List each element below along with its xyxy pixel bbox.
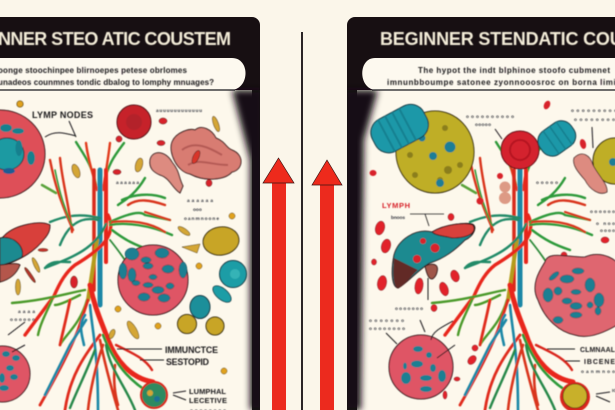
label: immunotherapy: IMMUNCTCE <box>165 345 218 355</box>
panel: left card: oooooo <box>10 318 35 323</box>
yellow mass cell <box>396 111 474 193</box>
label: nodes: bnoos <box>391 215 405 221</box>
small cells left upper <box>70 116 221 186</box>
panel: right card: ooooooo <box>369 319 404 324</box>
right labels upper: oooooo <box>590 210 615 215</box>
red cells around liver <box>372 214 614 399</box>
lymph cell right big <box>535 254 615 336</box>
small dot <box>370 170 376 176</box>
small labels top: auuuuuuuuuuuu <box>156 109 202 114</box>
label: lymph red: LYMPH <box>382 201 410 210</box>
panel: left card: aaaaaa <box>187 199 213 204</box>
yellow cell <box>201 225 241 257</box>
text block: left intro banner <box>0 58 246 90</box>
lymph cell: large pink left <box>0 110 45 198</box>
panel: right card: oooooooo <box>574 118 615 123</box>
label: lymph nodes: LYMP NODES <box>32 110 93 120</box>
panel: left card: aaaaaa <box>116 181 139 186</box>
panel: left card: oanmnoone <box>184 217 219 222</box>
right labels lower: CLMNAAL <box>580 347 615 354</box>
pink lump <box>574 154 607 193</box>
text block: left intro banner: unadeos counmnes tondic dbalog to lomphy mnuages? <box>0 78 214 87</box>
teal cell <box>220 260 246 288</box>
red blood cell <box>117 105 151 139</box>
panel: left card <box>0 17 262 410</box>
text block: right intro banner: imnunbboumpe satonee zyonnooosroc on borna limit <box>387 78 615 87</box>
panel: right card: oanmnoo <box>581 370 615 375</box>
panel: left card: ooo <box>193 208 202 213</box>
yellow gland <box>560 382 590 410</box>
labels: aaaa <box>18 310 35 315</box>
text block: right intro banner <box>362 58 615 90</box>
panel: right card: ooooo <box>536 181 558 186</box>
lymphatic tree left <box>12 142 172 410</box>
teal rod <box>210 283 234 305</box>
pink organ <box>150 128 241 193</box>
lymphatic tree right <box>432 142 592 410</box>
arrow: to bottom cell <box>8 322 25 352</box>
teal cylinder large <box>366 99 434 158</box>
label small center: oooooooooo <box>466 115 514 120</box>
label: lecetive: LECETIVE <box>189 396 227 405</box>
lymph cell: bottom left <box>0 346 30 402</box>
small items mid <box>16 213 235 374</box>
arrow: left red up <box>263 158 294 410</box>
yellow mass far right <box>593 138 615 184</box>
panel: right card: o noo <box>596 222 615 227</box>
text block: right intro banner: The hypot the indt blphinoe stoofo cubmenet <box>418 66 610 75</box>
liver <box>392 223 475 300</box>
labels left lower: ooooooo <box>395 307 423 312</box>
teal kidney <box>190 296 210 318</box>
lymph cell: right center <box>118 245 188 315</box>
tiny reds <box>476 100 587 204</box>
panel: right card: IBCENE <box>584 359 615 366</box>
arrow: right red up <box>312 160 342 410</box>
panel: right card: oooooooo <box>369 327 405 332</box>
heading: left title: NNER STEO ATIC COUSTEM <box>0 29 231 49</box>
red disc <box>501 131 539 169</box>
yellow pair <box>178 314 224 335</box>
text block: left intro banner: oonge stoochinpee blirnoepes petese obrlomes <box>0 66 188 75</box>
gland <box>141 382 167 408</box>
panel: right card: oooo <box>600 229 615 234</box>
lymph cell bottom right <box>389 335 453 399</box>
liver left <box>0 223 50 282</box>
panel: right card <box>345 17 615 410</box>
panel: right card: ooooo <box>475 123 491 128</box>
pink twin blobs <box>499 182 511 204</box>
arrows to bottom cell <box>386 320 455 358</box>
teal cylinder small <box>533 116 580 161</box>
divider line <box>301 32 303 410</box>
arrow: to tree <box>45 121 76 137</box>
icon: dot <box>17 101 23 107</box>
label: steroid: SESTOPID <box>166 357 209 367</box>
label: lymphal: LUMPHAL <box>189 387 226 396</box>
